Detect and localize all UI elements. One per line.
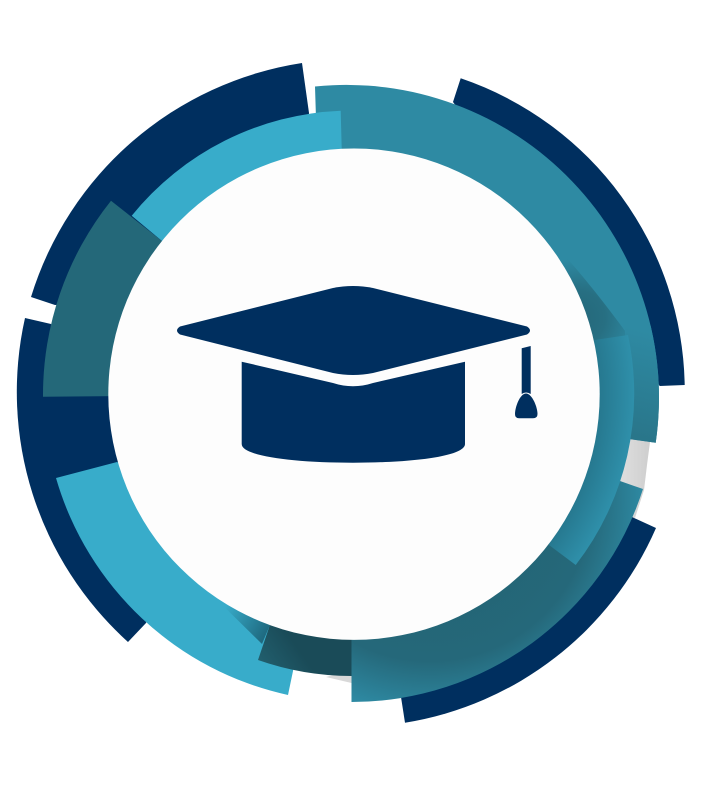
shaded strip of teal ring	[625, 326, 659, 443]
tassel cord	[522, 346, 531, 394]
navy outer arc: top left	[31, 63, 309, 305]
navy outer arc: left	[17, 318, 200, 642]
graduation cap ring graphic	[16, 63, 685, 723]
gray shadow piece: bottom	[326, 670, 352, 683]
dark teal segment: left	[43, 201, 354, 397]
dark teal ring segment: bottom right	[352, 481, 643, 702]
tassel head	[515, 394, 538, 418]
inner teal segment: right	[549, 335, 634, 565]
shadow on light blue segment	[208, 591, 272, 644]
icon: graduation cap	[177, 286, 538, 463]
cap base	[242, 362, 465, 463]
teal ring segment: top right	[315, 85, 659, 443]
white centre circle	[108, 149, 600, 640]
gray shadow piece: right	[620, 439, 650, 518]
navy outer arc: top right	[453, 78, 685, 386]
dark teal segment: bottom	[258, 610, 352, 676]
light blue segment: bottom left	[56, 462, 305, 695]
shadow on teal ring	[565, 266, 625, 341]
navy outer arc: bottom right	[401, 517, 656, 723]
light blue segment: top	[132, 111, 342, 300]
cap board	[177, 286, 530, 375]
